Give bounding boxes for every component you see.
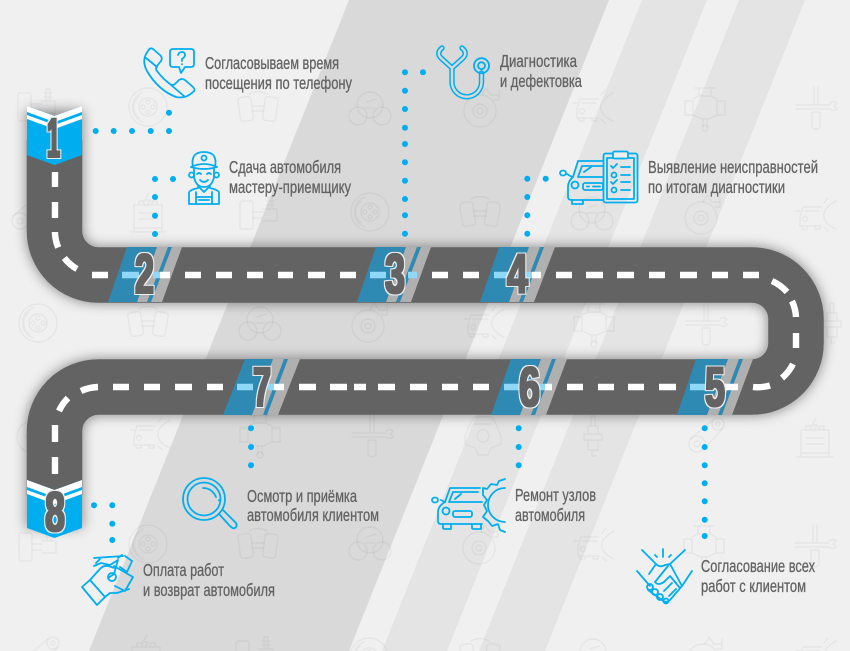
text: step 6: автомобиля <box>515 505 585 525</box>
icon: car and checklist <box>560 152 638 204</box>
step numbers: 2 <box>135 242 154 305</box>
icon: magnifier <box>183 478 237 528</box>
text: step 2: Сдача автомобиля <box>229 157 341 177</box>
dotted connectors <box>91 69 708 543</box>
text: step 2 <box>229 157 351 197</box>
icon: stethoscope <box>439 48 489 97</box>
step numbers: 6 <box>519 355 540 418</box>
step numbers: 4 <box>507 242 528 305</box>
icon: car with gear <box>432 479 505 532</box>
text: step 3 <box>500 51 582 91</box>
step numbers <box>45 106 725 543</box>
text: step 3: и дефектовка <box>500 71 582 91</box>
finish marker <box>27 480 82 538</box>
text: step 6: Ремонт узлов <box>515 485 596 505</box>
step numbers: 7 <box>253 355 271 418</box>
icon: hand with money <box>82 555 133 605</box>
text: step 7: Осмотр и приёмка <box>247 486 357 506</box>
text: step 4 <box>648 157 818 197</box>
text: step 1: посещения по телефону <box>205 73 352 93</box>
text: step 1 <box>205 53 352 93</box>
text: step 7: автомобиля клиентом <box>247 505 379 525</box>
start marker <box>27 106 82 165</box>
road <box>27 106 796 538</box>
icon: handshake <box>637 549 692 604</box>
step markers on upper road <box>108 247 555 302</box>
text: step 4: по итогам диагностики <box>648 177 785 197</box>
icon: mechanic <box>189 152 219 204</box>
text: step 2: мастеру-приемщику <box>229 177 351 197</box>
step numbers: 3 <box>385 242 405 305</box>
step numbers: 8 <box>45 480 65 543</box>
text: step 1: Согласовываем время <box>205 53 339 73</box>
text: step 5 <box>701 556 815 596</box>
step numbers: 1 <box>47 106 60 169</box>
text: step 3: Диагностика <box>500 51 577 71</box>
lane dashes <box>55 172 796 474</box>
text: step 7 <box>247 486 379 525</box>
text: step 6 <box>515 485 596 525</box>
text: step 8: Оплата работ <box>143 560 224 580</box>
text: step 8 <box>143 560 275 600</box>
icon: phone with question bubble <box>144 48 194 97</box>
text: step 5: работ с клиентом <box>701 576 806 596</box>
step markers on lower road <box>223 359 753 415</box>
road shadow <box>54 110 796 528</box>
text: step 8: и возврат автомобиля <box>143 580 275 600</box>
step numbers: 5 <box>705 355 725 418</box>
